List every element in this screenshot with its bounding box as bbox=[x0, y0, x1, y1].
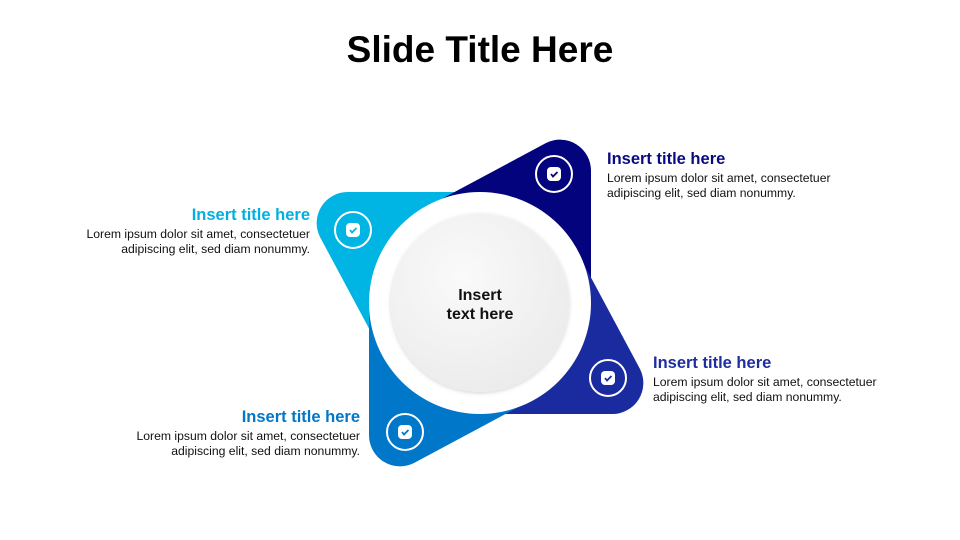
text block: bottom left: Insert title here bbox=[242, 408, 360, 426]
text block: bottom left: Lorem ipsum dolor sit amet, consectetuer bbox=[136, 429, 360, 443]
title: Slide Title Here bbox=[347, 29, 613, 70]
text block: right: adipiscing elit, sed diam nonummy. bbox=[653, 390, 842, 404]
inner circle bbox=[391, 214, 569, 392]
shape: blue bbox=[480, 257, 643, 414]
diagram: text here bbox=[447, 306, 513, 323]
icon: azure bbox=[387, 414, 423, 450]
text block: left: Lorem ipsum dolor sit amet, consectetuer bbox=[86, 227, 310, 241]
shape: azure bbox=[369, 303, 526, 466]
text block: left: adipiscing elit, sed diam nonummy. bbox=[121, 242, 310, 256]
icon: blue bbox=[590, 360, 626, 396]
text block: top right bbox=[607, 150, 831, 200]
text block: top right: Insert title here bbox=[607, 150, 725, 168]
shape: cyan bbox=[317, 192, 480, 349]
icon: cyan bbox=[335, 212, 371, 248]
text block: bottom left: adipiscing elit, sed diam nonummy. bbox=[171, 444, 360, 458]
text block: top right: Lorem ipsum dolor sit amet, consectetuer bbox=[607, 171, 831, 185]
white circle bbox=[369, 192, 591, 414]
center text: Insert bbox=[458, 287, 502, 304]
icon: navy bbox=[536, 156, 572, 192]
text block: left bbox=[86, 206, 310, 256]
text block: top right: adipiscing elit, sed diam nonummy. bbox=[607, 186, 796, 200]
text block: right bbox=[653, 354, 877, 404]
text block: left: Insert title here bbox=[192, 206, 310, 224]
text block: right: Lorem ipsum dolor sit amet, consectetuer bbox=[653, 375, 877, 389]
shape: navy bbox=[434, 140, 591, 303]
text block: right: Insert title here bbox=[653, 354, 771, 372]
text block: bottom left bbox=[136, 408, 360, 458]
